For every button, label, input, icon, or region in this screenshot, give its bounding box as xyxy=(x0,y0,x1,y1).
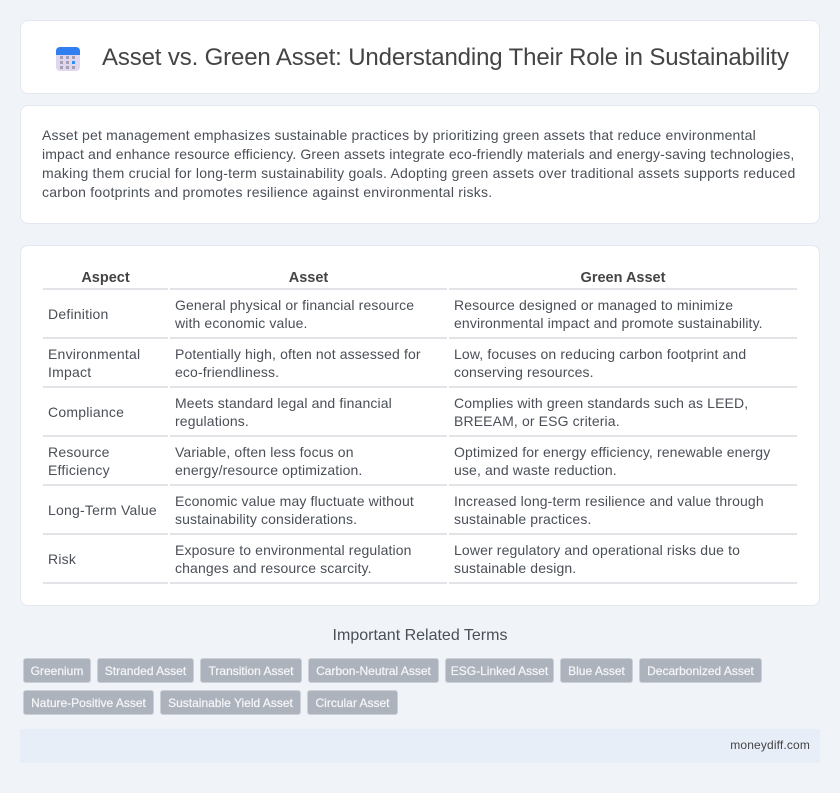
definition green: environmental impact and promote sustainability. xyxy=(454,315,763,331)
definition green: Resource designed or managed to minimize xyxy=(454,297,733,313)
definition green xyxy=(454,297,763,331)
impact green: Low, focuses on reducing carbon footprint and xyxy=(454,346,746,362)
value green xyxy=(454,493,764,527)
value asset xyxy=(175,493,414,527)
impact asset: eco-friendliness. xyxy=(175,364,279,380)
row: definition: Definition xyxy=(48,306,109,322)
efficiency asset: Variable, often less focus on xyxy=(175,444,354,460)
related terms tags: Carbon-Neutral Asset xyxy=(316,664,431,678)
compliance green: Complies with green standards such as LEED, xyxy=(454,395,748,411)
compliance asset xyxy=(175,395,392,429)
impact asset: Potentially high, often not assessed for xyxy=(175,346,421,362)
related terms tags: Blue Asset xyxy=(568,664,625,678)
related terms tags xyxy=(23,658,762,715)
table card xyxy=(20,245,820,606)
row: compliance: Compliance xyxy=(48,404,124,420)
related terms tags: Stranded Asset xyxy=(105,664,186,678)
intro text: making them crucial for long-term sustainability goals. Adopting green assets over traditional assets supports reduced xyxy=(42,165,796,181)
compliance asset: regulations. xyxy=(175,413,249,429)
intro text xyxy=(42,127,796,200)
definition asset: with economic value. xyxy=(175,315,308,331)
footer bar xyxy=(20,729,820,763)
table header: aspect: Aspect xyxy=(81,270,130,286)
compliance asset: Meets standard legal and financial xyxy=(175,395,392,411)
compliance green xyxy=(454,395,748,429)
row: resource efficiency: Resource xyxy=(48,444,110,460)
row: risk: Risk xyxy=(48,551,76,567)
impact asset xyxy=(175,346,421,380)
related terms tags: Decarbonized Asset xyxy=(647,664,754,678)
risk asset: Exposure to environmental regulation xyxy=(175,542,412,558)
related terms tags: ESG-Linked Asset xyxy=(451,664,548,678)
table header: green asset: Green Asset xyxy=(581,270,665,286)
impact green: conserving resources. xyxy=(454,364,594,380)
related terms tags: Transition Asset xyxy=(209,664,293,678)
table header: asset: Asset xyxy=(289,270,328,286)
value asset: sustainability considerations. xyxy=(175,511,357,527)
row: resource efficiency: Efficiency xyxy=(48,462,110,478)
intro text: Asset pet management emphasizes sustainable practices by prioritizing green assets that reduce environmental xyxy=(42,127,756,143)
value green: sustainable practices. xyxy=(454,511,592,527)
risk green: sustainable design. xyxy=(454,560,576,576)
risk asset: changes and resource scarcity. xyxy=(175,560,372,576)
row: environmental impact xyxy=(48,346,140,380)
related terms tags: Greenium xyxy=(31,664,83,678)
row: resource efficiency xyxy=(48,444,110,478)
efficiency green xyxy=(454,444,770,478)
risk asset xyxy=(175,542,412,576)
header card xyxy=(20,20,820,94)
value asset: Economic value may fluctuate without xyxy=(175,493,414,509)
footer source: moneydiff.com xyxy=(730,738,810,752)
row: environmental impact: Environmental xyxy=(48,346,140,362)
row: environmental impact: Impact xyxy=(48,364,91,380)
intro card xyxy=(20,105,820,224)
related terms tags: Circular Asset xyxy=(315,696,390,710)
intro text: impact and enhance resource efficiency. Green assets integrate eco-friendly materials and energy-saving technologies, xyxy=(42,146,794,162)
risk green: Lower regulatory and operational risks due to xyxy=(454,542,740,558)
risk green xyxy=(454,542,740,576)
related terms tags: Nature-Positive Asset xyxy=(31,696,146,710)
efficiency asset: energy/resource optimization. xyxy=(175,462,362,478)
value green: Increased long-term resilience and value through xyxy=(454,493,764,509)
definition asset xyxy=(175,297,414,331)
icon: calendar xyxy=(56,47,80,71)
intro text: carbon footprints and promotes resilience against environmental risks. xyxy=(42,184,492,200)
row: long-term value: Long-Term Value xyxy=(48,502,157,518)
definition asset: General physical or financial resource xyxy=(175,297,414,313)
efficiency asset xyxy=(175,444,362,478)
related terms heading: Important Related Terms xyxy=(333,627,507,644)
related terms tags: Sustainable Yield Asset xyxy=(168,696,293,710)
compliance green: BREEAM, or ESG criteria. xyxy=(454,413,620,429)
efficiency green: Optimized for energy efficiency, renewable energy xyxy=(454,444,770,460)
title: Asset vs. Green Asset: Understanding Their Role in Sustainability xyxy=(102,44,789,71)
efficiency green: use, and waste reduction. xyxy=(454,462,617,478)
impact green xyxy=(454,346,746,380)
